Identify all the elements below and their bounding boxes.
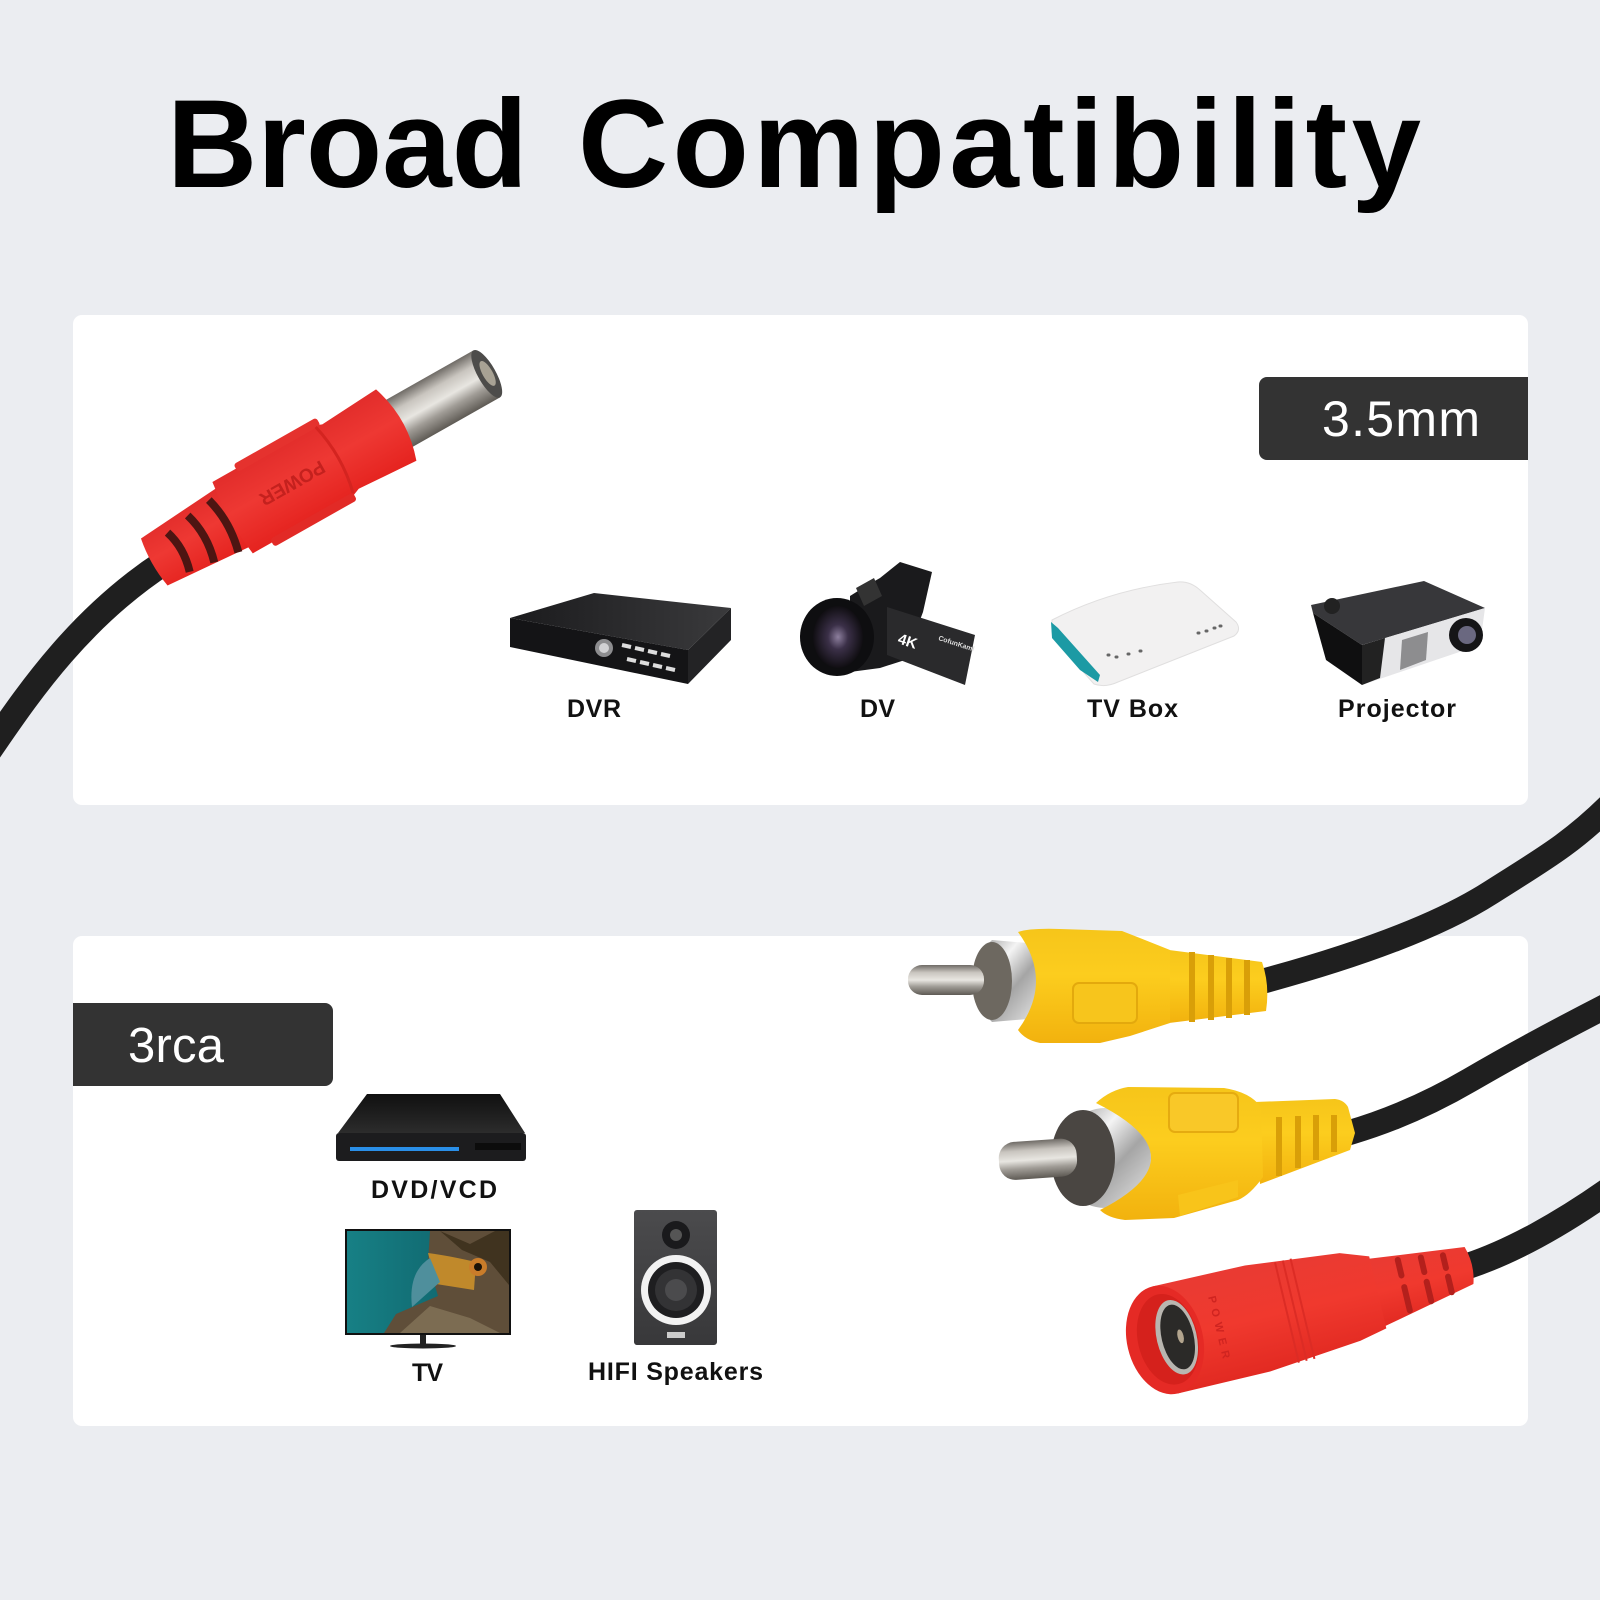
- moulded body: [207, 382, 425, 559]
- label: HIFI Speakers: HIFI Speakers: [588, 1358, 763, 1386]
- badge: 3rca: [73, 1003, 333, 1086]
- eagle image on screen: [384, 1231, 509, 1333]
- panel: 3rca devices: [73, 936, 1528, 1426]
- middle yellow RCA plug with cable: [998, 1003, 1600, 1220]
- cable: [1260, 803, 1600, 982]
- red female DC connector with cable: [1115, 1188, 1600, 1402]
- title: [167, 75, 1421, 214]
- yellow boot: [1255, 1099, 1355, 1184]
- label: DV: DV: [860, 695, 895, 723]
- cable: [1348, 1003, 1600, 1133]
- label: DVR: DVR: [567, 695, 621, 723]
- strain relief boot: [135, 486, 253, 593]
- red male DC plug with cable: [0, 329, 517, 752]
- top yellow RCA plug with cable: [908, 803, 1600, 1043]
- center pin: [908, 965, 984, 995]
- device: DV camcorder: CofunKaml: [937, 635, 975, 653]
- badge: 3.5mm: [1259, 377, 1528, 460]
- title: Broad: [167, 75, 528, 214]
- cable: [1468, 1188, 1600, 1266]
- metal barrel: [382, 346, 508, 449]
- connector face: [1115, 1278, 1215, 1402]
- chrome shell: [1051, 1108, 1151, 1208]
- connector barrel: POWER: [1205, 1295, 1232, 1360]
- device: TV box: [1051, 582, 1239, 686]
- label: TV: TV: [412, 1359, 443, 1387]
- panel: 3.5mm devices: [73, 315, 1528, 805]
- center pin: [998, 1138, 1078, 1181]
- cable: [0, 562, 165, 752]
- badge: 3.5mm: 3.5mm: [1322, 391, 1480, 447]
- title: Compatibility: [578, 75, 1421, 214]
- device: TV: [345, 1229, 511, 1348]
- yellow body: [1018, 929, 1267, 1043]
- device: projector: [1311, 581, 1485, 685]
- device: DV camcorder: [800, 562, 975, 685]
- device: HIFI speaker: [634, 1210, 717, 1345]
- device: DVD player: [336, 1094, 526, 1161]
- badge: 3rca: 3rca: [128, 1019, 225, 1073]
- label: TV Box: TV Box: [1087, 695, 1178, 723]
- label: projector: Projector: [1338, 695, 1456, 723]
- device: DVR: [510, 593, 731, 684]
- label: DVD/VCD: DVD/VCD: [371, 1176, 497, 1204]
- connector barrel: [1152, 1236, 1390, 1394]
- grip pads: [1169, 1093, 1238, 1216]
- device: DV camcorder: 4K: [896, 631, 919, 653]
- moulded body: POWER: [255, 456, 328, 509]
- strain relief boot: [1367, 1236, 1481, 1327]
- chrome shell: [972, 940, 1040, 1022]
- yellow body: [1096, 1087, 1263, 1220]
